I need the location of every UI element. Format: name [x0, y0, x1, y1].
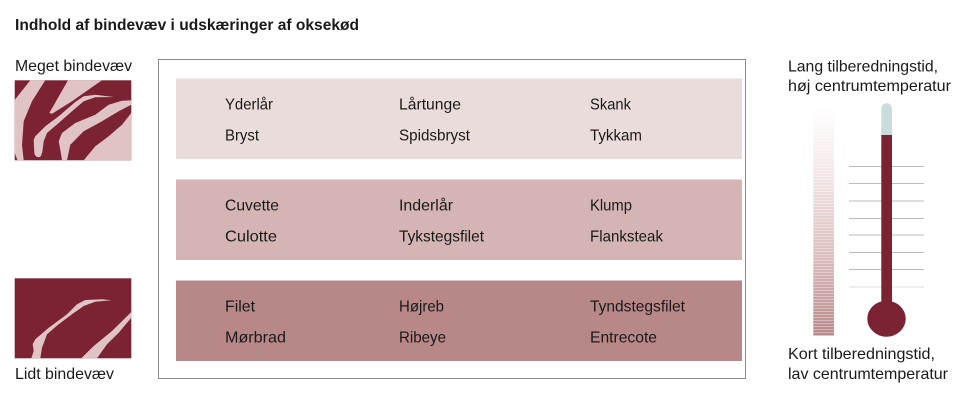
band: medium connective tissue: Inderlår: [399, 196, 454, 214]
band: much connective tissue: [176, 78, 742, 159]
panel: cuts of beef: [158, 60, 746, 378]
title: Indhold af bindevæv i udskæringer af oksekød: [15, 17, 359, 34]
icon: meat texture with little connective tissue: [15, 278, 131, 358]
band: little connective tissue: Ribeye: [399, 330, 446, 346]
band: much connective tissue: Bryst: [225, 128, 260, 144]
label: short cooking time: [788, 346, 949, 383]
label: lidt bindevæv: Lidt bindevæv: [15, 366, 114, 383]
band: medium connective tissue: Cuvette: [225, 198, 279, 214]
band: much connective tissue: Yderlår: [225, 96, 274, 114]
band: medium connective tissue: Culotte: [225, 228, 277, 246]
band: little connective tissue: [176, 280, 742, 361]
label: short cooking time: lav centrumtemperatur: [788, 366, 949, 383]
band: medium connective tissue: [176, 180, 742, 260]
label: short cooking time: Kort tilberedningstid,: [788, 346, 935, 363]
band: medium connective tissue: Flanksteak: [590, 228, 664, 246]
band: much connective tissue: Tykkam: [590, 128, 642, 144]
label: long cooking time: høj centrumtemperatur: [788, 78, 952, 95]
band: little connective tissue: Mørbrad: [225, 330, 286, 346]
band: much connective tissue: Skank: [590, 96, 632, 114]
band: medium connective tissue: Tykstegsfilet: [399, 228, 485, 246]
band: much connective tissue: Spidsbryst: [399, 128, 471, 144]
thermometer: [849, 103, 924, 337]
band: much connective tissue: Lårtunge: [399, 96, 461, 114]
label: meget bindevæv: Meget bindevæv: [15, 58, 132, 75]
band: little connective tissue: Filet: [225, 298, 256, 316]
label: long cooking time: Lang tilberedningstid,: [788, 58, 938, 76]
band: little connective tissue: Højreb: [399, 298, 444, 316]
label: long cooking time: [788, 58, 952, 95]
gradient scale bar: [813, 107, 834, 336]
band: medium connective tissue: Klump: [590, 198, 632, 214]
band: little connective tissue: Tyndstegsfilet: [590, 298, 686, 316]
icon: meat texture with much connective tissue: [15, 80, 131, 160]
band: little connective tissue: Entrecote: [590, 330, 657, 346]
